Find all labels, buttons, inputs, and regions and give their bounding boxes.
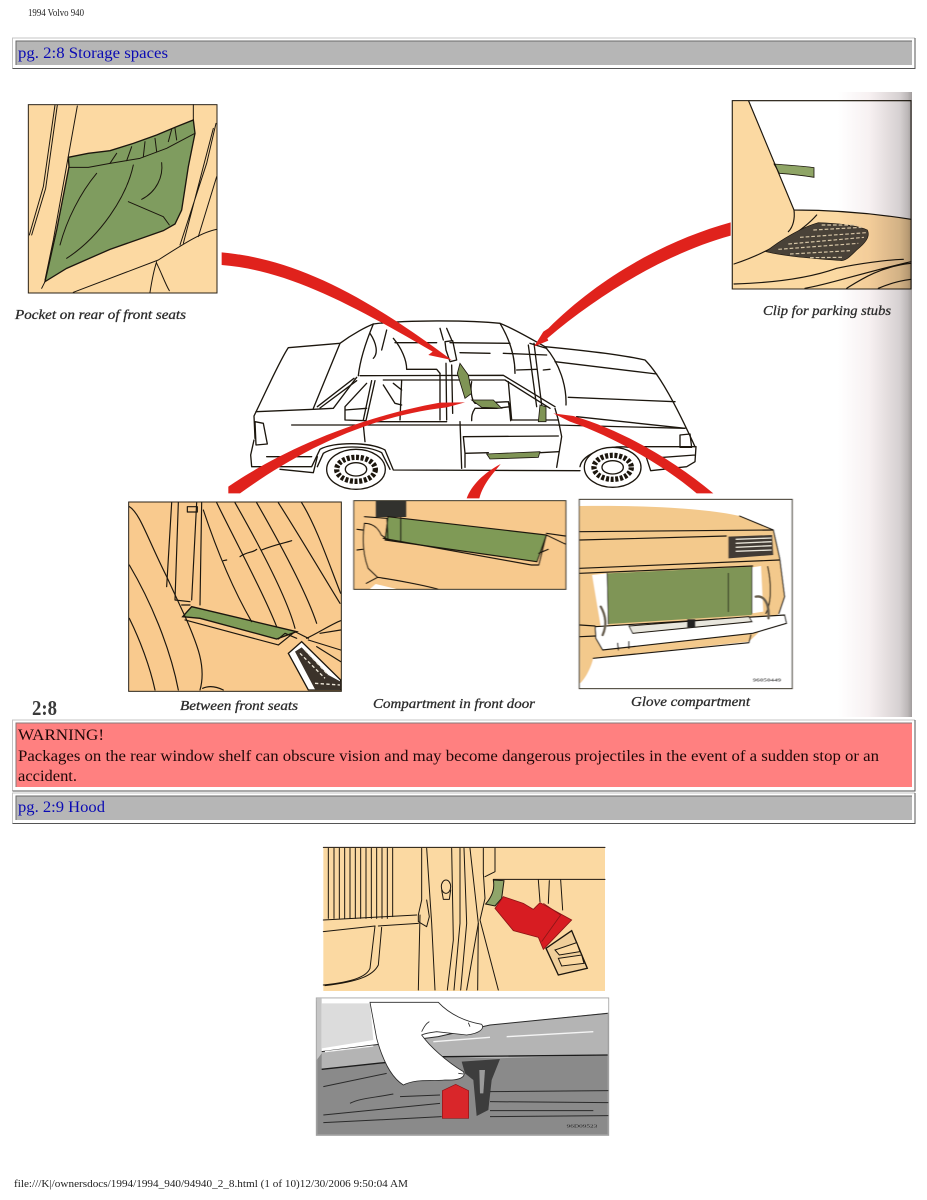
dark trim [376,501,406,517]
warning box: Packages on the rear window shelf can obscure vision and may become dangerous projectiles in the event of a sudden stop or an [18,748,879,765]
panel: glove compartment [579,499,792,689]
section bar: pg. 2:9 Hood: pg. 2:9 Hood [18,799,105,816]
section bar: pg. 2:8 Storage spaces [12,38,915,68]
car body silhouette [250,321,695,483]
wheels [327,447,641,489]
arrow: clip to car [534,222,731,347]
caption: clip: Clip for parking stubs [763,304,892,319]
panel: between front seats [129,502,341,691]
door hinge plates [592,566,763,627]
red catch hook [442,1084,469,1118]
caption: glove compartment: Glove compartment [631,695,751,710]
pedal [546,931,587,975]
pocket: green seat pocket [45,120,195,282]
red hood release handle [495,897,572,949]
scanned page edge shadow [838,92,912,717]
arrow: door compartment [467,464,501,498]
caption: pocket: Pocket on rear of front seats [14,308,187,323]
section bar: pg. 2:8 Storage spaces: pg. 2:8 Storage spaces [18,45,168,62]
door pocket [385,517,546,562]
upper wall [317,998,608,1053]
glove door [595,615,786,650]
page number 2:8: 2:8 [32,696,57,720]
illustration: hood safety catch [317,998,608,1135]
dashboard [580,506,785,683]
armrest compartment [183,607,297,639]
vent grille [766,223,868,261]
car line drawing [250,321,696,489]
green stalk [486,880,504,906]
rear vent [288,642,341,690]
panel: compartment in front door [354,501,566,589]
dark catch mechanism [462,1059,500,1116]
clip: green parking stub clip [774,164,814,177]
white sliver [370,584,396,589]
part number: 96050449 [753,678,781,682]
arrow: between seats [228,402,465,493]
panel: pocket on rear of front seats [28,105,217,293]
arrows: lower panels to car [228,402,713,498]
illustration: hood release lever [323,847,605,991]
compartment interior [607,567,753,624]
running header: 1994 Volvo 940 [28,8,84,19]
finger detail [422,1022,470,1074]
section bar: pg. 2:9 Hood [12,793,915,824]
hood edge [322,1013,608,1069]
running footer: file:///K|/ownersdocs/1994/1994_940/94940_2_8.html (1 of 10)12/30/2006 9:50:04 AM [14,1179,409,1190]
warning box [12,720,915,791]
arrow: pocket to car [222,252,452,360]
arrow: glove compartment [553,413,713,493]
warning box: accident. [18,768,77,785]
caption: between front seats: Between front seats [180,699,299,714]
warning box: WARNING! [18,727,104,744]
part number: 96D09523 [567,1123,597,1128]
caption: compartment in front door: Compartment in front door [373,697,536,712]
air vent [728,535,773,558]
green storage highlights on car [457,363,546,459]
panel: clip for parking stubs [732,101,911,289]
hand [370,1002,483,1085]
